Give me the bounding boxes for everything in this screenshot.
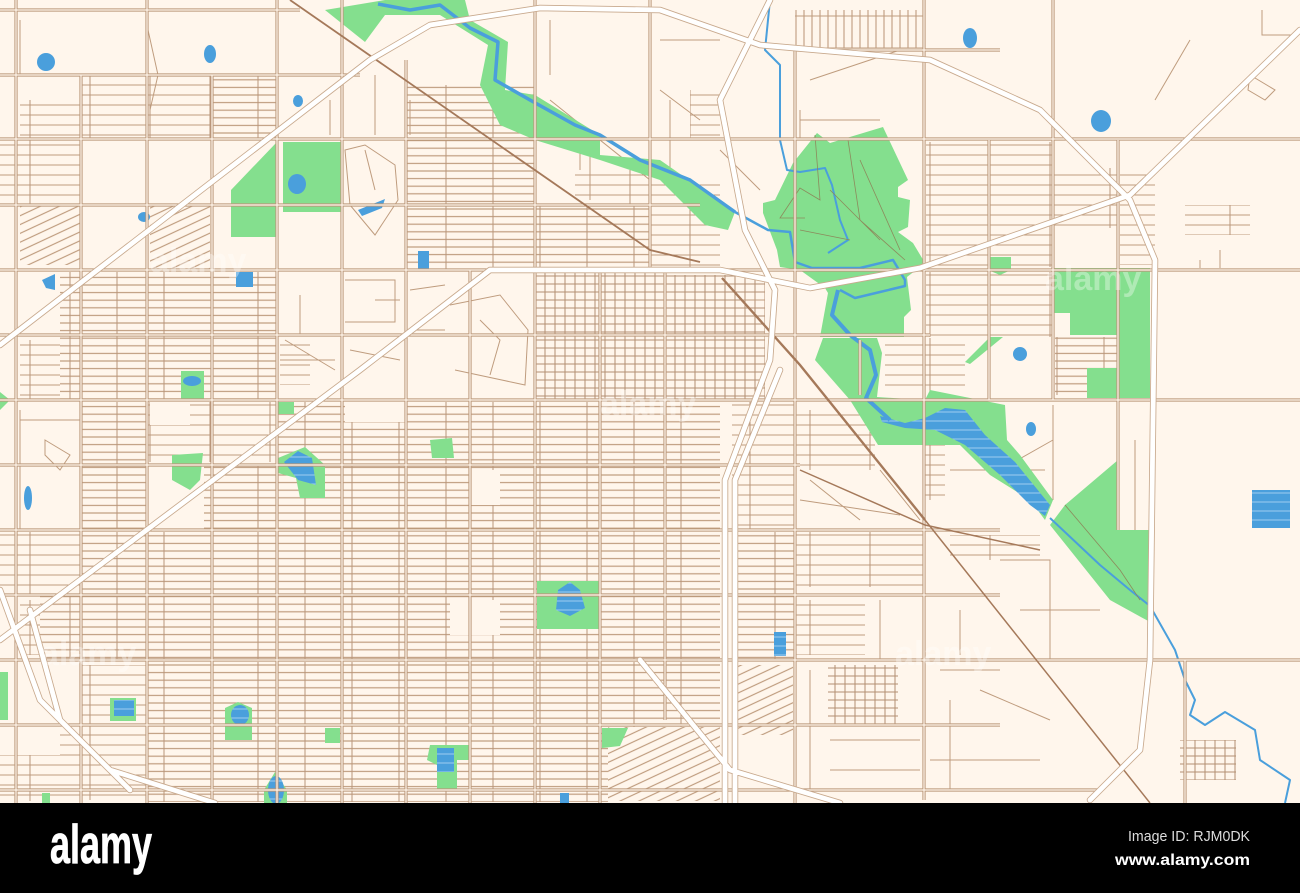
lake: west park xyxy=(284,451,316,485)
watermark ghosts: alamy xyxy=(150,242,246,280)
image id: Image ID: RJM0DK xyxy=(1128,828,1250,845)
alamy logo: alamy xyxy=(50,813,152,875)
rivers xyxy=(378,0,1290,803)
lake: large east lake xyxy=(880,408,1050,516)
park: central large park xyxy=(763,127,925,337)
park: east large xyxy=(1053,268,1150,398)
watermark ghosts: alamy xyxy=(895,635,991,673)
parks xyxy=(0,0,1150,803)
website: www.alamy.com xyxy=(1114,852,1250,869)
park trails xyxy=(780,135,1140,600)
park: south of central park xyxy=(815,338,1053,520)
clearings in residential blocks xyxy=(150,400,500,635)
park: river corridor north xyxy=(325,0,735,230)
rail diagonal xyxy=(290,0,1150,803)
lake: south park xyxy=(556,582,585,616)
park: southeast xyxy=(1050,460,1150,622)
park: west rectangles xyxy=(231,143,276,237)
footer bar xyxy=(0,803,1300,893)
watermark ghosts: alamy xyxy=(40,635,136,673)
watermark ghosts xyxy=(40,242,1141,673)
watermark ghosts: alamy xyxy=(600,385,696,423)
watermark ghosts: alamy xyxy=(1045,260,1141,298)
